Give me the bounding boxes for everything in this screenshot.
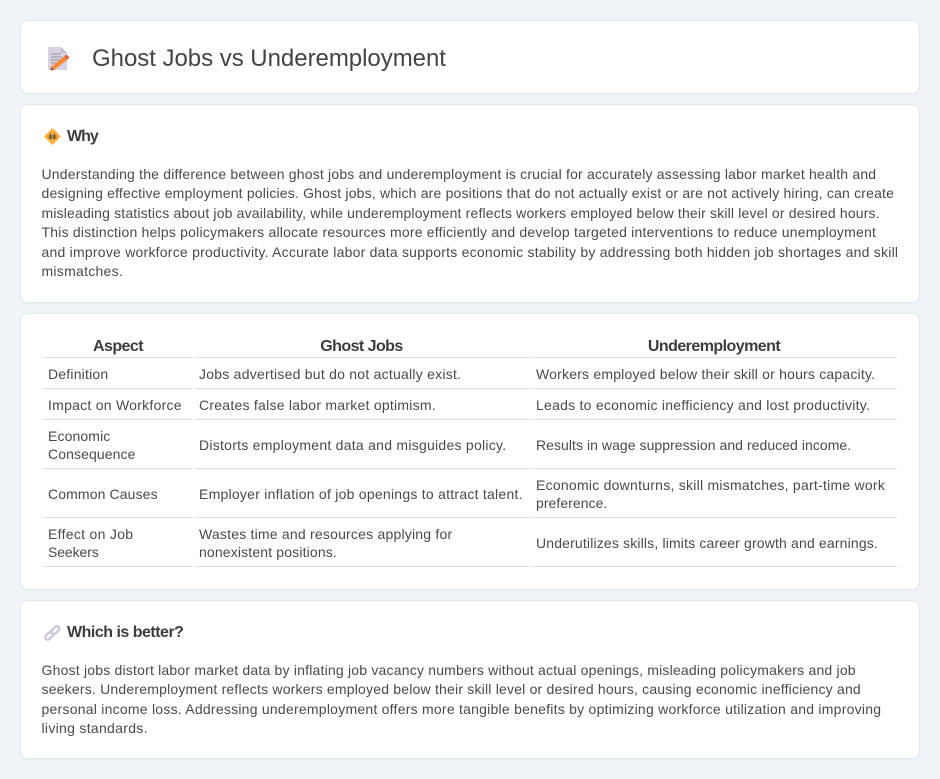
row: effect on job seekers: Wastes time and resources applying for (199, 526, 452, 542)
text block: why: This distinction helps policymakers allocate resources more efficiently and develop targeted interventions to reduce unemployment (42, 224, 876, 240)
row: economic consequence: Consequence (48, 446, 136, 462)
row: definition: Jobs advertised but do not actually exist. (199, 366, 461, 382)
row: common causes: Common Causes (48, 486, 158, 502)
row: effect on job seekers (48, 526, 878, 560)
row: common causes (48, 477, 885, 511)
text block: which is better (42, 662, 881, 736)
row: impact on workforce: Leads to economic inefficiency and lost productivity. (536, 397, 870, 413)
row: effect on job seekers: Effect on Job (48, 526, 133, 542)
row: effect on job seekers: Underutilizes skills, limits career growth and earnings. (536, 535, 878, 551)
text block: why: and improve workforce productivity. Accurate labor data supports economic stability by addressing both hidden job shortages and skill (42, 244, 898, 260)
row: economic consequence (48, 428, 851, 462)
panel: which is better (20, 600, 920, 759)
row: economic consequence: Distorts employment data and misguides policy. (199, 437, 506, 453)
text block: which is better: living standards. (42, 720, 148, 736)
text block: why: Understanding the difference between ghost jobs and underemployment is crucial for accurately assessing labor market health and (42, 166, 876, 182)
row: common causes: Economic downturns, skill mismatches, part-time work (536, 477, 885, 493)
row: effect on job seekers: nonexistent positions. (199, 544, 337, 560)
text block: which is better: personal income loss. Addressing underemployment offers more tangible benefits by optimizing workforce utilization and improving (42, 701, 881, 717)
icon: document with pencil (48, 47, 70, 70)
text block: why: mismatches. (42, 263, 123, 279)
table header: ghost jobs: Ghost Jobs (320, 338, 403, 355)
table header: aspect: Aspect (93, 338, 143, 355)
row: definition (48, 366, 875, 382)
icon: warning diamond (44, 128, 61, 145)
text block: which is better: Ghost jobs distort labor market data by inflating job vacancy numbers without actual openings, misleading policymakers and job (42, 662, 856, 678)
row: common causes: Employer inflation of job openings to attract talent. (199, 486, 523, 502)
text block: why: misleading statistics about job availability, while underemployment reflects workers employed below their skill level or desired hours. (42, 205, 880, 221)
heading: why: Why (67, 128, 98, 145)
panel: header (20, 20, 920, 94)
row: definition: Workers employed below their skill or hours capacity. (536, 366, 875, 382)
text block: why (42, 166, 898, 279)
row: definition: Definition (48, 366, 108, 382)
icon: chain link (44, 625, 60, 641)
row: impact on workforce: Creates false labor market optimism. (199, 397, 436, 413)
row: common causes: preference. (536, 495, 607, 511)
row: effect on job seekers: Seekers (48, 544, 99, 560)
table header: underemployment: Underemployment (648, 338, 780, 355)
row: impact on workforce (48, 397, 870, 413)
row: economic consequence: Economic (48, 428, 110, 444)
row: economic consequence: Results in wage suppression and reduced income. (536, 437, 851, 453)
title: Ghost Jobs vs Underemployment (92, 45, 446, 72)
heading: which is better: Which is better? (67, 624, 183, 641)
text block: why: designing effective employment policies. Ghost jobs, which are positions that do not actually exist or are not actively hiring, can create (42, 185, 894, 201)
text block: which is better: seekers. Underemployment reflects workers employed below their skill level or desired hours, causing economic inefficiency and (42, 681, 861, 697)
panel: comparison table (20, 313, 920, 590)
panel: why (20, 104, 920, 303)
row: impact on workforce: Impact on Workforce (48, 397, 182, 413)
